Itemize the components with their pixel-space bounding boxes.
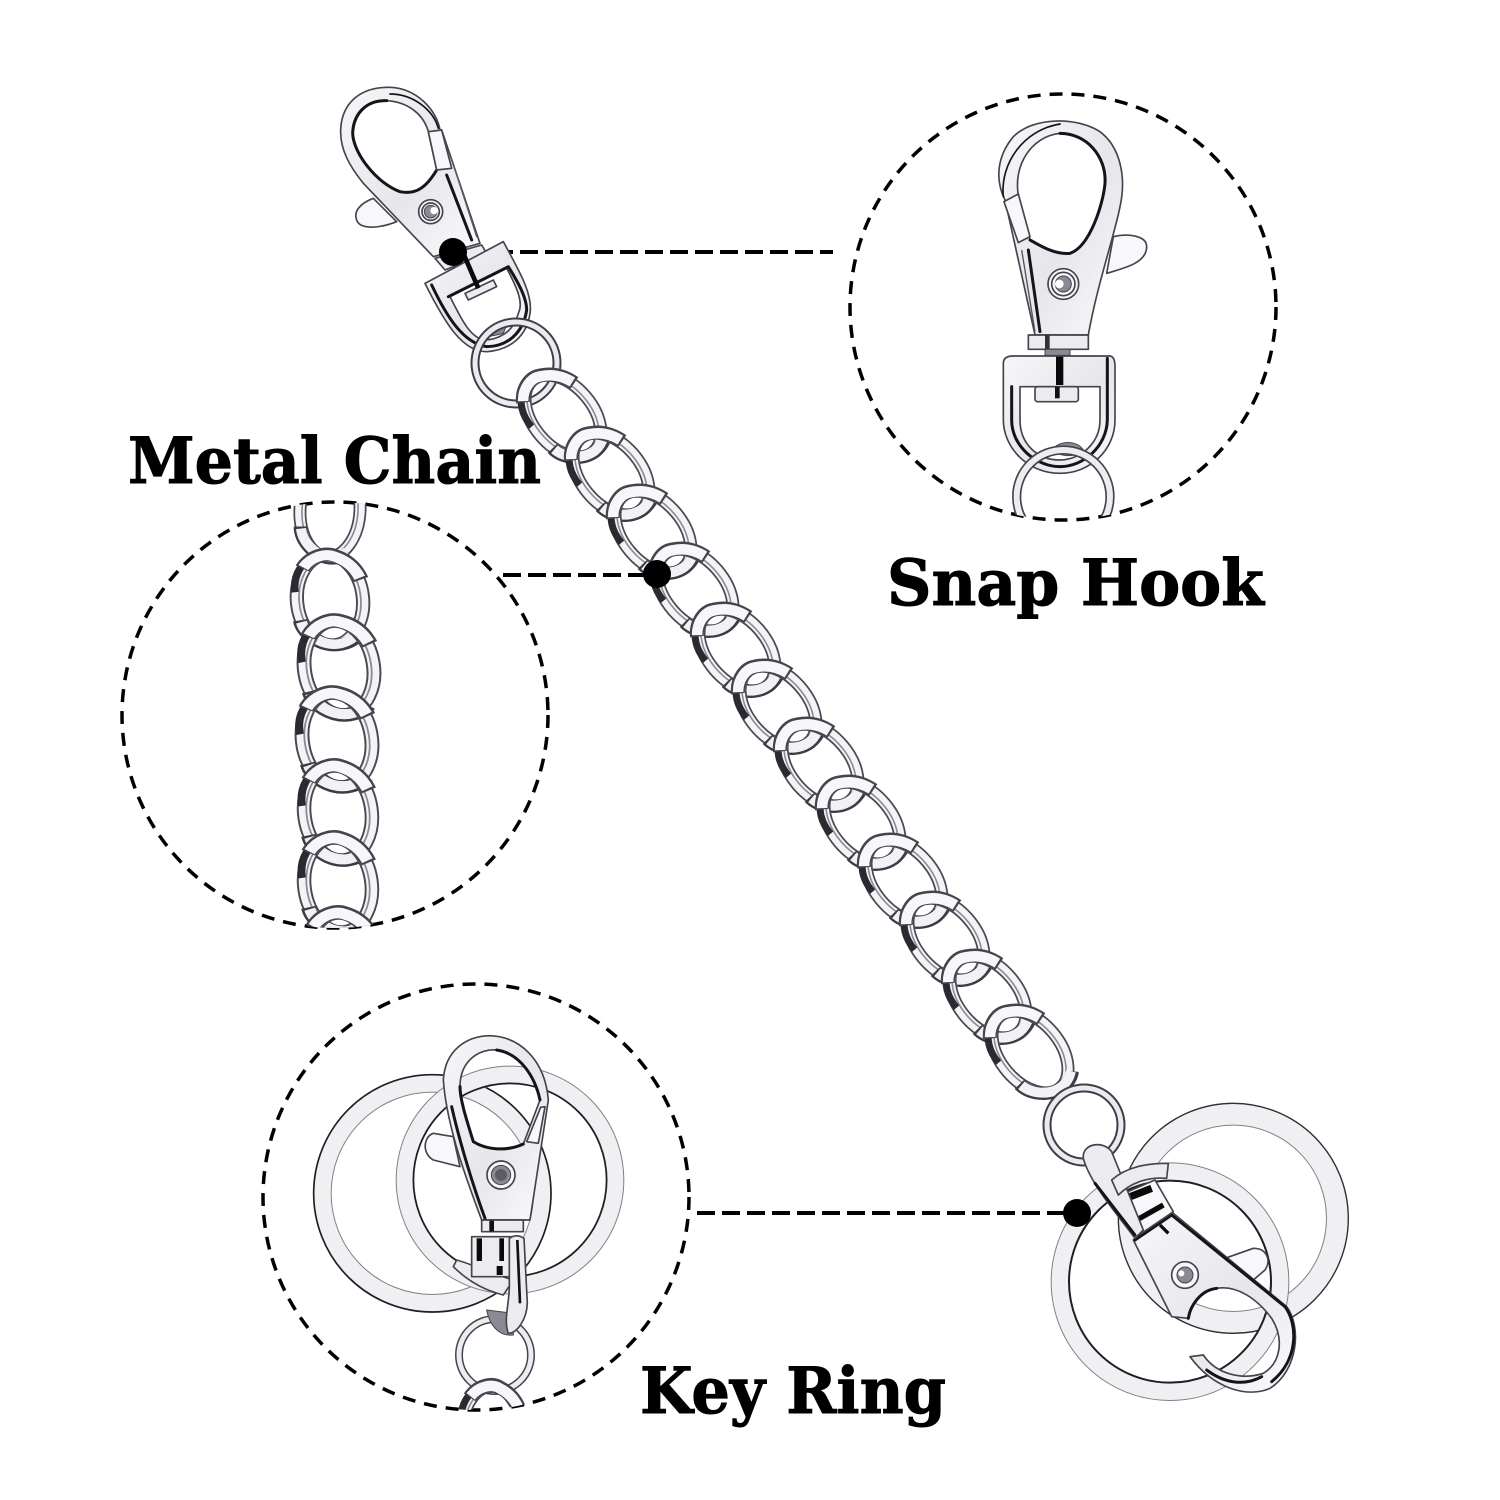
- key rings: [1060, 1103, 1348, 1392]
- panel: key ring detail: [261, 982, 691, 1412]
- dashed circle: [850, 94, 1276, 520]
- bottom snap hook: [1083, 1145, 1295, 1392]
- top snap hook: [341, 87, 530, 352]
- label: Snap Hook: Snap Hook: [887, 546, 1266, 621]
- snap hook enlarged: [999, 121, 1147, 543]
- panel: metal chain detail: [120, 500, 550, 930]
- dashed circle: [263, 984, 689, 1410]
- key rings and hook enlarged: [312, 1034, 624, 1410]
- label: Metal Chain: Metal Chain: [128, 424, 541, 499]
- marker dot: metal chain: [643, 560, 671, 588]
- dashed leader: snap hook: [470, 250, 833, 254]
- dashed circle: [122, 502, 548, 928]
- chain enlarged: [290, 502, 382, 928]
- dashed leader: key ring: [697, 1211, 1070, 1215]
- metal chain links: [508, 360, 1084, 1109]
- panel: snap hook detail: [850, 94, 1276, 543]
- bottom jump ring: [1047, 1088, 1121, 1162]
- top jump ring: [475, 322, 557, 404]
- marker dot: snap hook: [439, 238, 467, 266]
- main product: chain with hook and key rings: [341, 87, 1348, 1392]
- dashed leader: metal chain: [503, 573, 650, 577]
- label: Key Ring: Key Ring: [640, 1354, 946, 1429]
- marker dot: key ring: [1063, 1199, 1091, 1227]
